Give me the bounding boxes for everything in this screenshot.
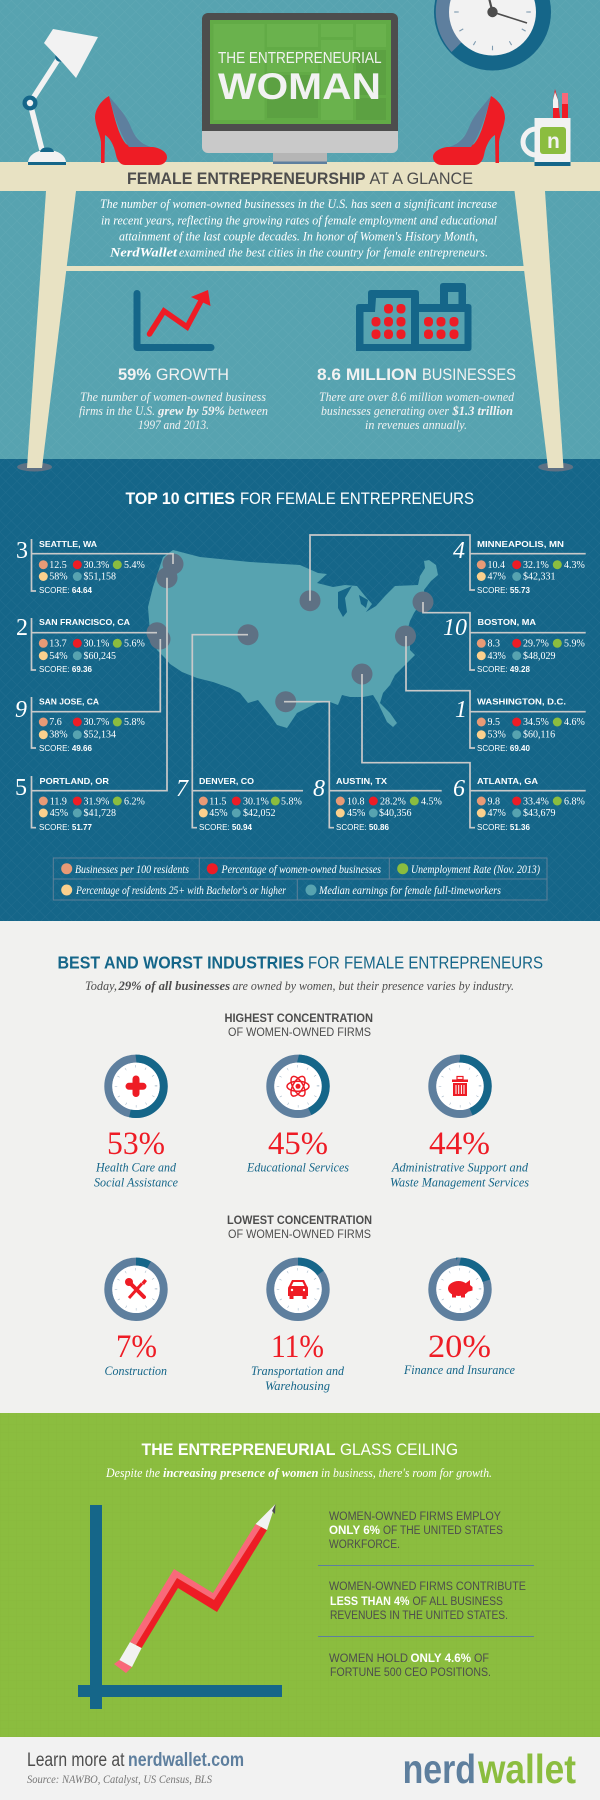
industry: transportation: Warehousing <box>265 1378 330 1393</box>
stat: 8.6 million businesses: in revenues annually. <box>365 418 467 432</box>
screen title: THE ENTREPRENEURIAL <box>218 50 382 67</box>
legend: Percentage of residents 25+ with Bachelor's or higher <box>75 883 286 897</box>
city: Boston: SCORE: 49.28 <box>477 665 530 674</box>
logo: nerdwallet <box>403 1746 576 1792</box>
industry: transportation: Transportation and <box>251 1363 344 1378</box>
industry: finance <box>403 1262 515 1377</box>
stat: 8.6 million businesses <box>317 365 516 432</box>
city: Denver: SCORE: 50.94 <box>199 823 252 832</box>
city: Portland: 6.2% <box>124 796 145 808</box>
legend: Businesses per 100 residents <box>75 862 189 876</box>
text block: glass ceiling subtitle: Despite the <box>105 1466 160 1480</box>
chart: axes with pencil line <box>78 1504 282 1709</box>
industry: construction: Construction <box>104 1363 167 1378</box>
stat: revenues: OF ALL BUSINESS <box>412 1596 503 1608</box>
city: Denver <box>176 635 303 832</box>
heading: glass ceiling <box>142 1440 458 1459</box>
city: Austin: $40,356 <box>379 808 412 819</box>
stat: 8.6 million businesses: There are over 8.6 million women-owned <box>319 390 515 404</box>
city: Atlanta <box>362 674 586 832</box>
city: San Francisco: 2 <box>16 615 28 641</box>
icon: desk lamp <box>22 29 98 165</box>
city: Boston: 8.3 <box>488 638 500 650</box>
city: Boston: 29.7% <box>523 638 549 650</box>
stat: workforce: WORKFORCE. <box>329 1539 400 1551</box>
city: San Jose: 30.7% <box>84 717 109 728</box>
stat: revenues: REVENUES IN THE UNITED STATES. <box>330 1610 508 1622</box>
heading: highest concentration: OF WOMEN-OWNED FIRMS <box>228 1027 371 1039</box>
heading: best and worst industries: FOR FEMALE ENTREPRENEURS <box>308 952 543 972</box>
stat: 59% growth: 1997 and 2013. <box>138 418 209 432</box>
logo: nerdwallet: wallet <box>477 1746 576 1792</box>
city: San Francisco: 54% <box>49 651 68 662</box>
city: Seattle <box>16 538 173 595</box>
city: Boston: 43% <box>488 651 506 662</box>
city: Washington DC: 1 <box>455 697 467 723</box>
city: San Jose: $52,134 <box>84 730 116 740</box>
city: Austin: 8 <box>313 776 325 802</box>
panel: footer <box>0 1737 600 1800</box>
donut: 44% <box>432 1059 488 1114</box>
screen title: WOMAN <box>218 66 381 107</box>
stat: 59% growth: between <box>228 404 268 418</box>
city: San Jose: 38% <box>49 730 68 740</box>
heading: glass ceiling: GLASS CEILING <box>340 1440 458 1459</box>
panel: header and desk scene <box>0 0 600 472</box>
stat: fortune 500: ONLY 4.6% <box>410 1653 471 1665</box>
city: Washington DC: 9.5 <box>488 717 500 728</box>
city: San Jose: 9 <box>15 697 27 723</box>
heading: at a glance: FEMALE ENTREPRENEURSHIP <box>127 169 366 188</box>
city: San Francisco: $60,245 <box>84 651 116 662</box>
city: Atlanta: ATLANTA, GA <box>477 776 538 786</box>
text block: learn more <box>27 1750 244 1786</box>
text block: glass ceiling subtitle <box>105 1466 492 1480</box>
stat: 59% growth: GROWTH <box>156 365 229 384</box>
icon: red high heel left <box>95 96 167 165</box>
heading: best and worst industries: BEST AND WORST INDUSTRIES <box>58 952 304 972</box>
text block: learn more: Learn more at <box>27 1750 125 1771</box>
stat: 59% growth <box>79 365 268 432</box>
icon: zigzag pencil <box>114 1504 276 1673</box>
city: Seattle: 12.5 <box>49 560 67 571</box>
city: Atlanta: SCORE: 51.36 <box>477 823 530 832</box>
industry: administrative support: Waste Management Services <box>390 1175 529 1190</box>
stat: fortune 500: WOMEN HOLD <box>329 1653 408 1665</box>
city: Denver: 5.8% <box>281 796 302 808</box>
panel: top 10 cities <box>0 459 600 921</box>
heading: best and worst industries <box>58 952 543 972</box>
city: Denver: 7 <box>176 776 189 802</box>
city: San Jose <box>15 639 160 753</box>
city: San Francisco: SAN FRANCISCO, CA <box>39 617 130 627</box>
city: Minneapolis: 4 <box>453 538 465 564</box>
city: Boston: BOSTON, MA <box>478 617 536 627</box>
stat: revenues: LESS THAN 4% <box>330 1596 410 1608</box>
heading: highest concentration <box>224 1013 373 1039</box>
text block: intro paragraph: in recent years, reflecting the growing rates of female employment and educational <box>101 214 498 228</box>
city: Boston: 5.9% <box>564 638 585 650</box>
city: Austin: 4.5% <box>421 796 442 808</box>
industry: administrative support <box>390 1059 529 1190</box>
city: Seattle: $51,158 <box>84 572 116 582</box>
text block: intro paragraph: NerdWallet <box>109 246 178 260</box>
industry: transportation: 11% <box>271 1329 324 1365</box>
stat: 8.6 million businesses: businesses generating over <box>321 404 449 418</box>
industry: administrative support: 44% <box>429 1126 490 1162</box>
city: Portland: SCORE: 51.77 <box>39 823 92 832</box>
stat: 59% growth: grew by 59% <box>157 404 225 418</box>
icon: red high heel right <box>433 96 505 165</box>
industry: health care: Health Care and <box>95 1160 176 1175</box>
city: Minneapolis <box>310 535 586 601</box>
city: Minneapolis: MINNEAPOLIS, MN <box>477 539 564 549</box>
industry: construction: 7% <box>116 1329 157 1365</box>
industry: educational services: Educational Services <box>246 1160 349 1175</box>
city: San Francisco <box>16 615 157 674</box>
text block: industries subtitle <box>85 979 514 993</box>
heading: lowest concentration: OF WOMEN-OWNED FIRMS <box>228 1229 371 1241</box>
text block: glass ceiling stats <box>318 1511 534 1679</box>
city: Atlanta: 6 <box>453 776 465 802</box>
industry: finance: 20% <box>428 1329 491 1365</box>
stat: 59% growth: The number of women-owned business <box>80 390 266 404</box>
city: Portland: PORTLAND, OR <box>40 776 109 786</box>
stat: 8.6 million businesses: BUSINESSES <box>422 365 516 384</box>
donut: 11% <box>270 1262 326 1317</box>
logo: nerdwallet: nerd <box>403 1746 476 1792</box>
city: Atlanta: 9.8 <box>488 796 500 808</box>
heading: top 10 cities: TOP 10 CITIES <box>126 489 235 508</box>
icon: wall clock <box>434 0 551 70</box>
text block: industries subtitle: are owned by women, but their presence varies by industry. <box>232 979 514 993</box>
map: united states <box>148 550 438 728</box>
industry: construction <box>104 1262 167 1378</box>
city: Atlanta: 33.4% <box>523 796 549 808</box>
map location dots <box>146 554 434 712</box>
stat: revenues <box>329 1581 526 1622</box>
icon: factory <box>356 283 472 351</box>
stat: 8.6 million businesses: $1.3 trillion <box>451 404 513 418</box>
stat: workforce <box>329 1511 503 1551</box>
stat: workforce: ONLY 6% <box>329 1525 380 1537</box>
city: Atlanta: 47% <box>488 808 506 819</box>
city: Seattle: SEATTLE, WA <box>39 539 97 549</box>
stat: fortune 500: OF <box>474 1653 489 1665</box>
industry: finance: Finance and Insurance <box>403 1362 515 1377</box>
city: Seattle: 3 <box>16 538 28 564</box>
industry: educational services <box>246 1059 349 1175</box>
heading: top 10 cities: FOR FEMALE ENTREPRENEURS <box>240 489 474 508</box>
donut: 45% <box>270 1059 326 1114</box>
city: Austin: 45% <box>347 808 365 819</box>
city: Washington DC: 4.6% <box>564 717 585 728</box>
city: Washington DC <box>406 636 586 753</box>
text block: intro paragraph: attainment of the last couple decades. In honor of Women's History Month, <box>119 230 478 244</box>
industry: transportation <box>251 1262 344 1393</box>
city: Washington DC: $60,116 <box>523 730 555 740</box>
industry: health care: Social Assistance <box>94 1175 178 1190</box>
city: Washington DC: 34.5% <box>523 717 549 728</box>
city: Denver: 45% <box>209 808 228 819</box>
city: Portland: 5 <box>15 775 27 801</box>
stat: fortune 500 <box>329 1653 491 1679</box>
city: Portland: 31.9% <box>84 796 109 808</box>
city: Washington DC: 53% <box>488 730 506 740</box>
legend <box>53 858 547 900</box>
screen title <box>218 50 382 107</box>
legend: Median earnings for female full-timeworkers <box>318 883 501 897</box>
city: San Francisco: SCORE: 69.36 <box>39 665 92 674</box>
city: Austin: SCORE: 50.86 <box>336 823 389 832</box>
city: San Francisco: 13.7 <box>49 638 67 650</box>
stat: 59% growth: 59% <box>118 365 151 384</box>
industry: health care: 53% <box>107 1126 165 1162</box>
text block: intro paragraph: examined the best cities in the country for female entrepreneurs. <box>179 246 488 260</box>
city: Portland: $41,728 <box>84 808 116 819</box>
city: Austin: AUSTIN, TX <box>336 776 387 786</box>
donut: 20% <box>432 1262 488 1317</box>
donut: 53% <box>108 1059 164 1114</box>
city: San Jose: 7.6 <box>49 717 62 728</box>
industry: educational services: 45% <box>268 1126 328 1162</box>
city: Portland: 11.9 <box>50 796 67 808</box>
city: Seattle: SCORE: 64.64 <box>39 586 92 595</box>
text block: learn more: Source: NAWBO, Catalyst, US Census, BLS <box>27 1772 212 1786</box>
text block: industries subtitle: 29% of all businesses <box>117 979 230 993</box>
city: Denver: $42,052 <box>243 808 276 819</box>
icon: growth chart <box>137 290 211 348</box>
stat: workforce: WOMEN-OWNED FIRMS EMPLOY <box>329 1511 501 1523</box>
city: Minneapolis: 32.1% <box>523 560 549 571</box>
legend: Percentage of women-owned businesses <box>221 862 381 876</box>
city: Atlanta: 6.8% <box>564 796 585 808</box>
city: Denver: 30.1% <box>243 796 269 808</box>
city: Portland <box>15 578 167 832</box>
city: Washington DC: SCORE: 69.40 <box>477 744 530 753</box>
text block: intro paragraph <box>100 197 498 260</box>
text block: learn more: nerdwallet.com <box>128 1750 244 1771</box>
heading: top 10 cities <box>126 489 474 508</box>
icon: computer monitor <box>202 13 398 164</box>
city: San Jose: 5.8% <box>124 717 145 728</box>
desk legs and top <box>0 162 600 472</box>
icon: coffee mug with pencils <box>523 89 570 166</box>
stat: fortune 500: FORTUNE 500 CEO POSITIONS. <box>330 1667 491 1679</box>
industry: administrative support: Administrative Support and <box>391 1160 528 1175</box>
text block: glass ceiling subtitle: increasing presence of women <box>163 1466 319 1480</box>
city: Boston: 10 <box>443 615 467 641</box>
heading: highest concentration: HIGHEST CONCENTRATION <box>224 1013 373 1025</box>
city: Austin: 28.2% <box>380 796 406 808</box>
text block: glass ceiling subtitle: in business, there's room for growth. <box>321 1466 492 1480</box>
city: San Francisco: 30.1% <box>84 638 109 650</box>
donut: 7% <box>108 1262 164 1317</box>
panel: best and worst industries <box>0 921 600 1413</box>
city: Atlanta: $43,679 <box>523 808 556 819</box>
city: Minneapolis: 10.4 <box>488 560 505 571</box>
city: Seattle: 30.3% <box>84 560 109 571</box>
text block: intro paragraph: The number of women-owned businesses in the U.S. has seen a significant increase <box>100 197 497 211</box>
heading: glass ceiling: THE ENTREPRENEURIAL <box>142 1440 336 1459</box>
city: Seattle: 5.4% <box>124 560 145 571</box>
city: Denver: DENVER, CO <box>199 776 254 786</box>
legend: Unemployment Rate (Nov. 2013) <box>411 862 540 876</box>
city: San Jose: SAN JOSE, CA <box>39 697 99 707</box>
industry: health care <box>94 1059 178 1190</box>
icon: coffee mug with pencils: n <box>547 130 560 153</box>
stat: 59% growth: firms in the U.S. <box>79 404 155 418</box>
text block: industries subtitle: Today, <box>85 979 117 993</box>
heading: at a glance: AT A GLANCE <box>370 169 473 188</box>
city: San Francisco: 5.6% <box>124 638 145 650</box>
city: Minneapolis: $42,331 <box>523 572 556 582</box>
city: Austin: 10.8 <box>347 796 364 808</box>
city: Denver: 11.5 <box>209 796 226 808</box>
city: Washington DC: WASHINGTON, D.C. <box>477 697 566 707</box>
panel: glass ceiling <box>0 1413 600 1737</box>
heading: lowest concentration: LOWEST CONCENTRATION <box>227 1215 372 1227</box>
city: Seattle: 58% <box>49 572 68 582</box>
city: Minneapolis: 4.3% <box>564 560 585 571</box>
stat: workforce: OF THE UNITED STATES <box>383 1525 503 1537</box>
city: Minneapolis: SCORE: 55.73 <box>477 586 530 595</box>
city: Minneapolis: 47% <box>488 572 506 582</box>
city: Portland: 45% <box>50 808 68 819</box>
heading: lowest concentration <box>227 1215 372 1241</box>
city: Boston: $48,029 <box>523 651 556 662</box>
city: San Jose: SCORE: 49.66 <box>39 744 92 753</box>
city: Austin <box>284 702 442 832</box>
stat: revenues: WOMEN-OWNED FIRMS CONTRIBUTE <box>329 1581 526 1593</box>
city: Boston <box>423 602 586 674</box>
stat: 8.6 million businesses: 8.6 MILLION <box>317 365 417 384</box>
